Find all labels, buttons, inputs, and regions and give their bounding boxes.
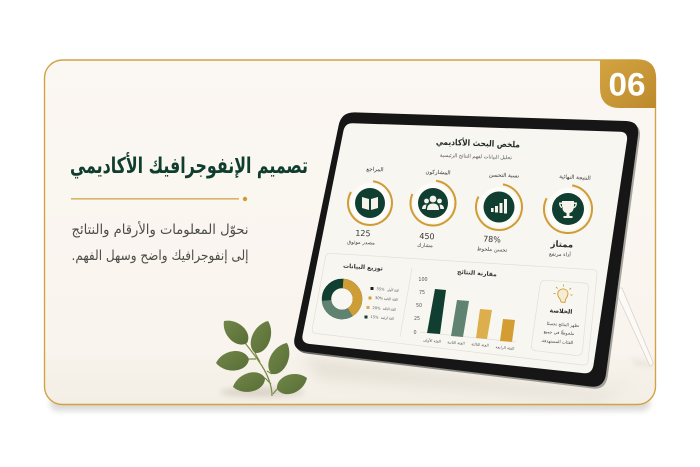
tablet black bezel [294, 112, 638, 387]
screen heading [436, 137, 520, 161]
metric: participants [408, 169, 458, 249]
panel divider [400, 268, 412, 337]
donut chart: توزيع البيانات [343, 263, 383, 272]
tablet stand [614, 288, 653, 366]
metric: final result: أداء مرتفع [549, 249, 572, 259]
title: تصميم الإنفوجرافيك الأكاديمي [70, 151, 308, 179]
text block: description: إلى إنفوجرافيك واضح وسهل الفهم. [72, 248, 248, 264]
panel: summary [531, 280, 589, 356]
panel: summary: الفئات المستهدفة. [540, 339, 573, 346]
legend [364, 287, 399, 321]
legend: الفئة الرابعة [381, 316, 394, 321]
legend: 20% [372, 306, 381, 311]
metric: final result: ممتاز [549, 239, 573, 251]
bar chart: الفئة الثانية [447, 339, 465, 346]
metric: references [345, 167, 395, 246]
bar chart: مقارنة النتائج [457, 269, 497, 278]
icon: book [362, 197, 378, 210]
divider with dot [71, 197, 247, 201]
badge: number 06 [600, 60, 656, 108]
metric: final result: النتيجة النهائية [559, 174, 591, 182]
bar chart: 50 [416, 303, 422, 309]
plant shadow [220, 387, 304, 397]
metric: improvement: تحسن ملحوظ [477, 246, 508, 254]
metric: participants: 450 [419, 232, 435, 241]
metric: participants: المشاركون [425, 169, 451, 176]
bar chart [413, 269, 516, 351]
tablet screen [302, 123, 627, 373]
icon: rising bars [491, 199, 507, 214]
legend: الفئة الثانية [384, 297, 398, 302]
metric: references: مصدر موثوق [347, 240, 375, 246]
bar chart: الفئة الأولى [423, 337, 441, 344]
legend: الفئة الأولى [387, 287, 399, 293]
bar chart: 75 [419, 290, 425, 296]
panel: summary: تظهر النتائج تحسنًا [546, 321, 580, 329]
card shadow [50, 394, 650, 411]
tablet [294, 112, 640, 389]
metric: references: المراجع [366, 167, 384, 173]
stem [245, 343, 277, 396]
metric: improvement [472, 172, 526, 254]
text block: description: نحوّل المعلومات والأرقام والنتائج [72, 221, 248, 238]
panel: main card [44, 60, 656, 404]
metric: improvement: نسبة التحسن [489, 172, 520, 180]
leaves [224, 321, 248, 345]
icon: people [422, 196, 444, 210]
icon: light bulb [554, 284, 572, 302]
donut chart [325, 263, 383, 316]
bar chart: 0 [413, 330, 417, 336]
metric: improvement: 78% [483, 235, 501, 244]
bar chart: 100 [418, 277, 428, 283]
bar chart: 25 [414, 316, 420, 322]
legend: 15% [370, 315, 379, 320]
tablet silver edge [296, 114, 640, 389]
legend: 35% [376, 287, 385, 292]
panel: summary: الخلاصة [549, 307, 573, 316]
legend: 30% [375, 296, 384, 301]
panel: charts [312, 253, 597, 365]
screen heading: ملخص البحث الأكاديمي [436, 137, 520, 150]
text block: description [72, 221, 248, 264]
bar chart: الفئة الرابعة [495, 344, 515, 351]
tablet shadow [300, 355, 640, 400]
badge: number 06: 06 [608, 66, 646, 102]
metric: final result [540, 174, 596, 259]
metric: participants: مشارك [417, 243, 433, 249]
stand shadow [630, 358, 652, 367]
bar chart: الفئة الثالثة [471, 341, 489, 348]
screen heading: تحليل البيانات لفهم النتائج الرئيسية [440, 153, 513, 161]
icon: trophy [559, 201, 577, 218]
plant [216, 321, 307, 396]
panel: summary: ملحوظًا في جميع [543, 328, 574, 337]
metric: references: 125 [355, 229, 371, 238]
legend: الفئة الثالثة [383, 307, 396, 312]
